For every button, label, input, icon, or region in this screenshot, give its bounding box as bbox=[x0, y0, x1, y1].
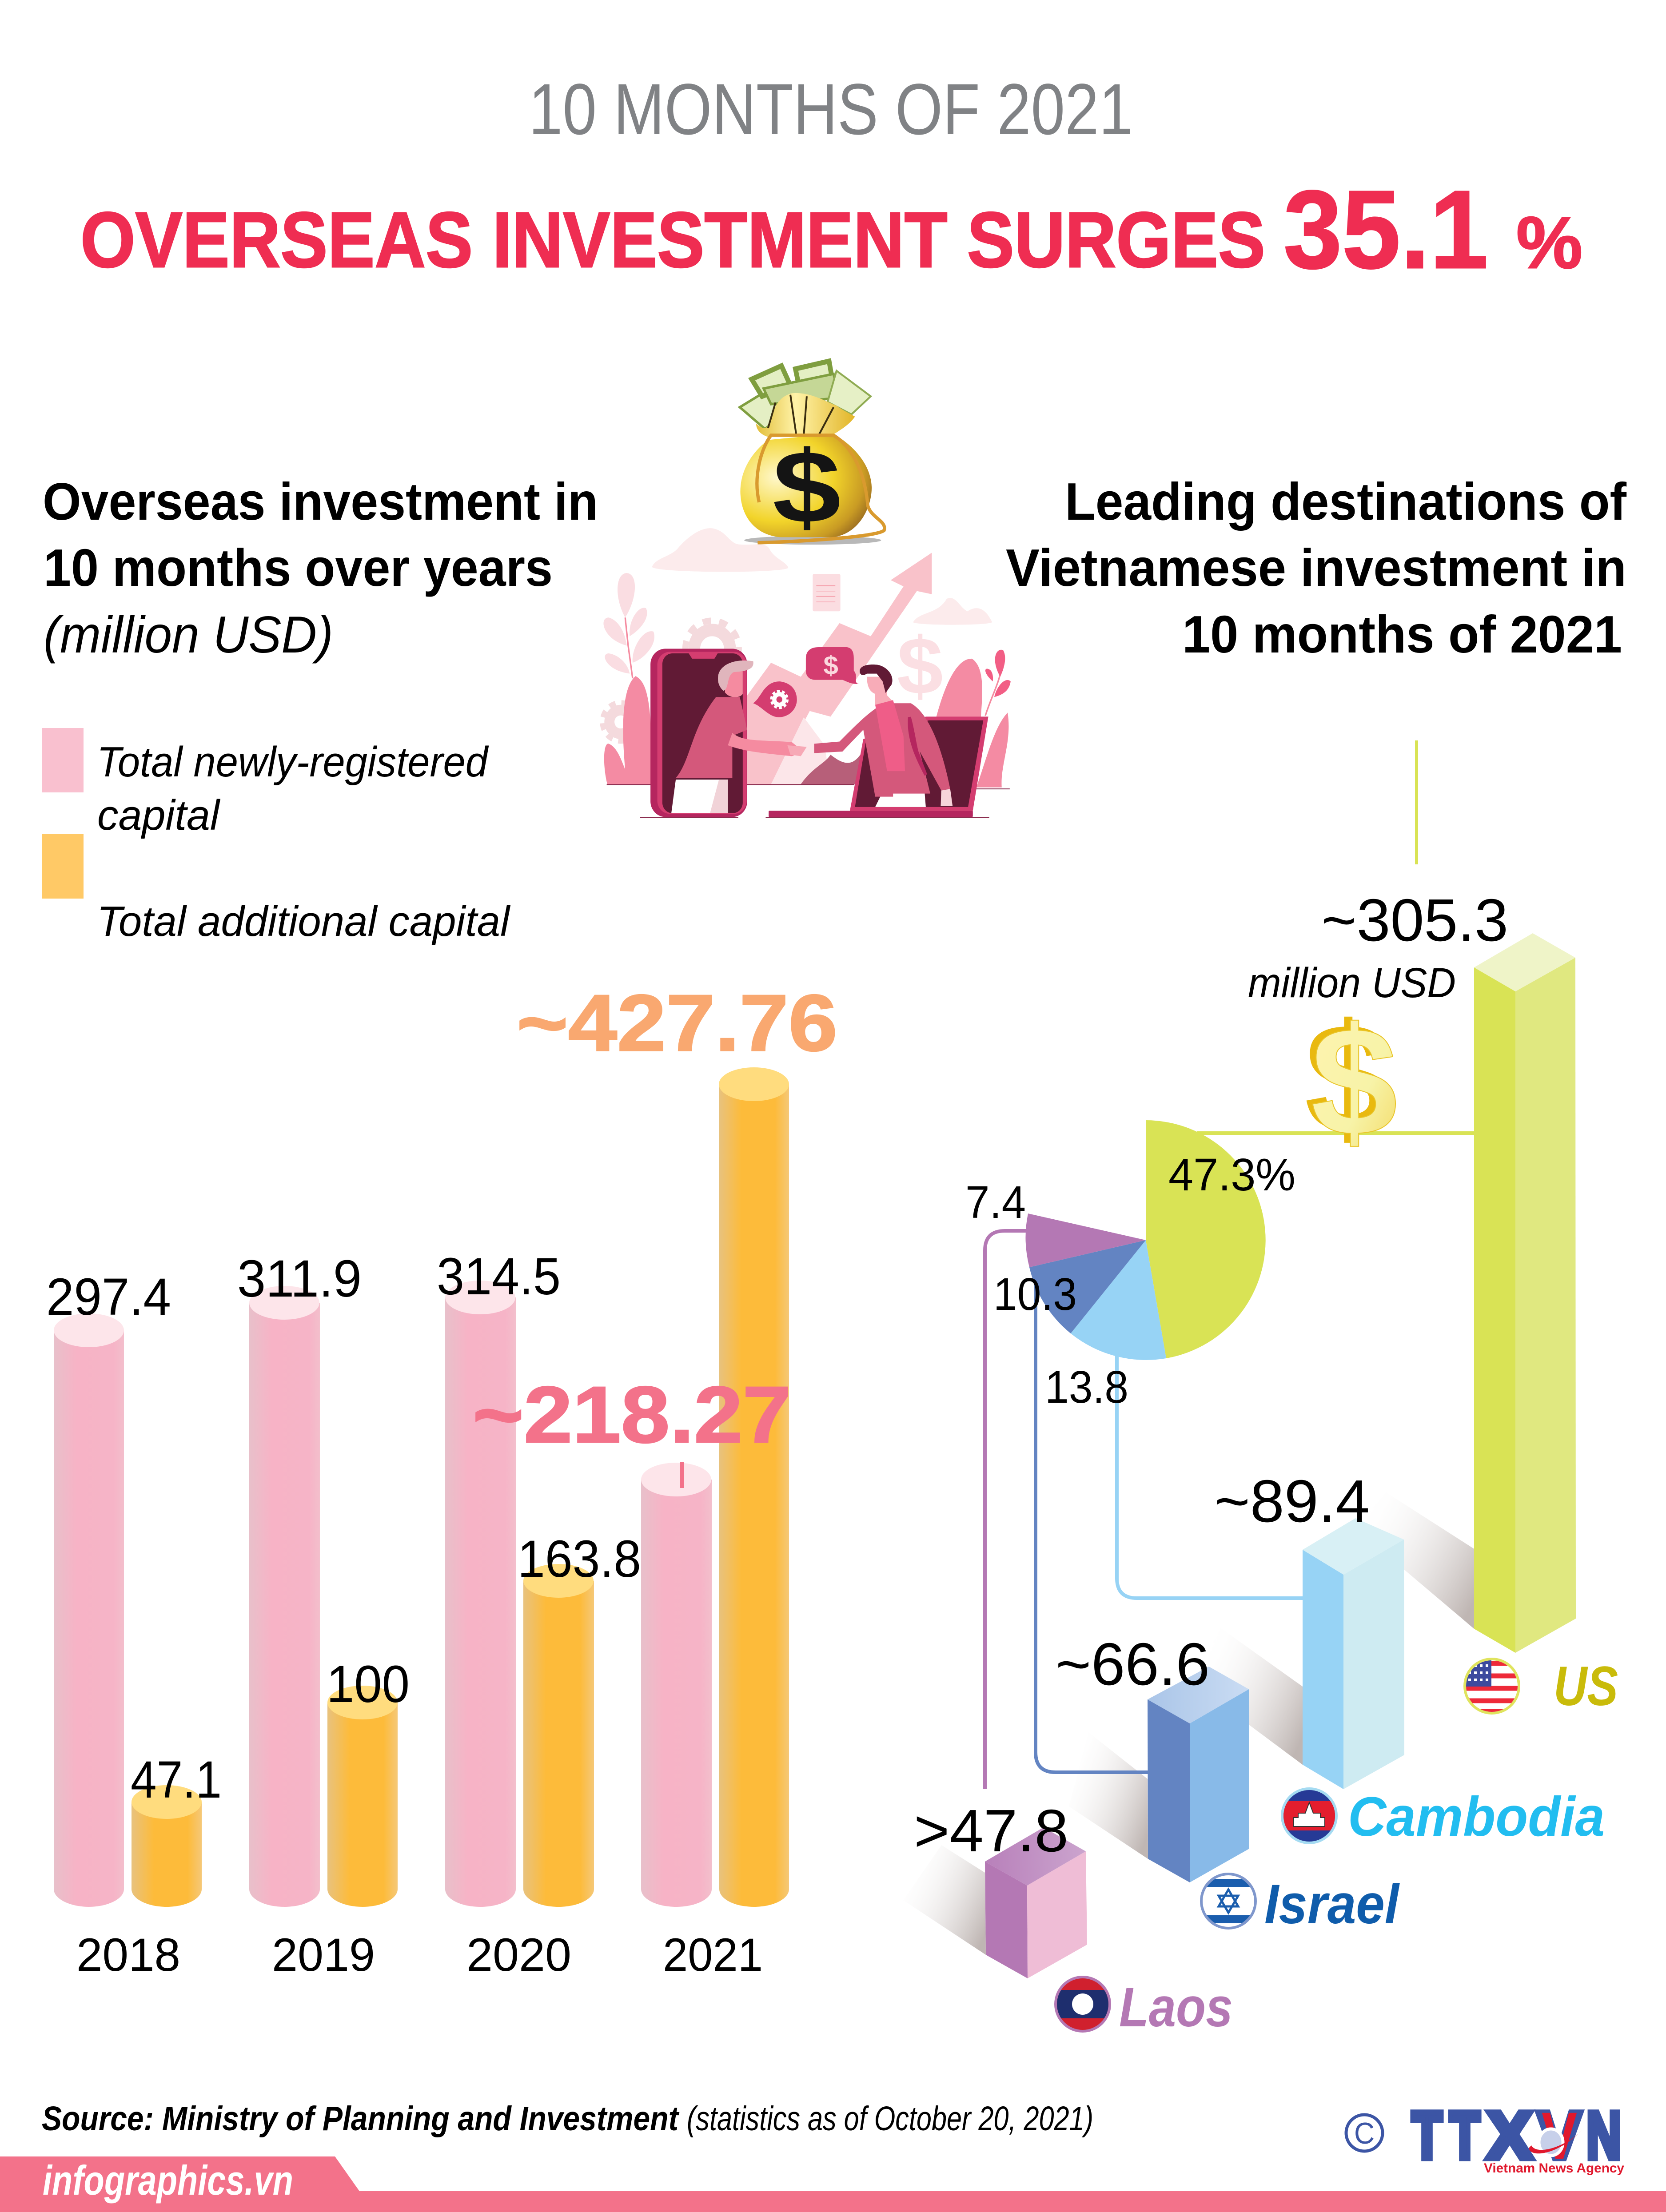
highlighted value 2021 additional: ~427.76 bbox=[517, 979, 837, 1068]
heading: overseas investment over years: (million USD) bbox=[44, 605, 333, 664]
pie chart bbox=[1026, 1120, 1266, 1360]
unit: million USD bbox=[1248, 959, 1456, 1007]
heading: leading destinations bbox=[1006, 472, 1626, 664]
ground lines bbox=[607, 784, 1010, 818]
cloud bbox=[652, 528, 788, 572]
heading: leading destinations: Leading destinations of bbox=[1065, 472, 1626, 531]
country: Cambodia: Cambodia bbox=[1348, 1786, 1605, 1848]
legend bbox=[42, 728, 511, 945]
logo: TTXVN: X bbox=[1487, 2098, 1532, 2172]
icon: money bag bbox=[740, 361, 885, 545]
heading: overseas investment over years: Overseas investment in bbox=[43, 472, 598, 531]
title: OVERSEAS INVESTMENT SURGES bbox=[80, 196, 1265, 284]
pie labels: 13.8 bbox=[1045, 1361, 1128, 1412]
icon: gold dollar: $ bbox=[1304, 991, 1391, 1164]
bar: Laos bbox=[985, 1827, 1087, 1978]
value labels: 47.1 bbox=[131, 1751, 222, 1809]
bar: Cambodia bbox=[1303, 1518, 1404, 1789]
bars 2019 bbox=[249, 1286, 398, 1907]
value labels: 297.4 bbox=[46, 1268, 171, 1326]
logo: TTXVN: Vietnam News Agency bbox=[1484, 2161, 1624, 2176]
bar: Israel bbox=[1148, 1667, 1249, 1882]
plants left bbox=[603, 573, 654, 674]
flag: Cambodia bbox=[1281, 1787, 1338, 1844]
destinations chart bbox=[903, 740, 1618, 2038]
heading: overseas investment over years bbox=[43, 472, 598, 664]
values bbox=[914, 887, 1508, 1864]
value labels: 311.9 bbox=[237, 1249, 362, 1308]
connector lines bbox=[985, 1133, 1474, 1789]
bar shadows bbox=[903, 1492, 1474, 1955]
title bbox=[80, 167, 1582, 291]
bar chart: investment by year bbox=[46, 979, 837, 1981]
copyright mark bbox=[1346, 2115, 1383, 2151]
pie labels: 10.3 bbox=[993, 1269, 1077, 1320]
dollar bubble bbox=[806, 647, 859, 684]
value labels: 163.8 bbox=[518, 1530, 641, 1588]
bars 2018 bbox=[54, 1313, 202, 1907]
title: % bbox=[1516, 202, 1582, 283]
illustration: business handshake: $ bbox=[823, 651, 838, 680]
bar: US bbox=[1474, 933, 1576, 1653]
source bbox=[42, 2100, 1093, 2138]
heading: leading destinations: 10 months of 2021 bbox=[1182, 605, 1622, 664]
flag: Israel bbox=[1200, 1872, 1257, 1930]
country: Laos: Laos bbox=[1119, 1977, 1233, 2038]
logo: TTXVN: V bbox=[1538, 2098, 1581, 2172]
logo: TTXVN: V bbox=[1542, 2098, 1577, 2173]
title: 35.1 bbox=[1283, 167, 1488, 291]
legend swatch: newly-registered capital bbox=[42, 728, 84, 792]
pie labels: 47.3% bbox=[1168, 1149, 1295, 1200]
icon: gold dollar: $ bbox=[1311, 995, 1398, 1168]
legend text: Total additional capital bbox=[97, 898, 511, 945]
gears bbox=[602, 621, 739, 741]
year labels: 2020 bbox=[466, 1929, 571, 1981]
logo: TTXVN: T bbox=[1412, 2098, 1442, 2172]
value labels: 314.5 bbox=[437, 1247, 561, 1306]
illustration: business handshake bbox=[602, 528, 1011, 818]
faded dollar: $ bbox=[897, 621, 943, 711]
woman in phone bbox=[671, 780, 728, 813]
legend text: Total newly-registered bbox=[97, 738, 489, 786]
legend text: capital bbox=[97, 792, 221, 839]
phone bbox=[650, 648, 747, 817]
source: (statistics as of October 20, 2021) bbox=[687, 2100, 1093, 2138]
logo: TTXVN: T bbox=[1450, 2098, 1480, 2172]
logo: TTXVN bbox=[1412, 2098, 1624, 2176]
vertical connector bbox=[1415, 740, 1418, 864]
heading: leading destinations: Vietnamese investment in bbox=[1006, 538, 1626, 597]
man at laptop bbox=[875, 770, 926, 807]
highlighted value 2021 new: ~218.27 bbox=[473, 1370, 791, 1460]
flag: US bbox=[1463, 1658, 1522, 1715]
year labels: 2021 bbox=[663, 1929, 763, 1981]
subtitle: 10 MONTHS OF 2021 bbox=[529, 68, 1133, 150]
values: >47.8 bbox=[914, 1797, 1068, 1864]
footer site name: infographics.vn bbox=[43, 2157, 293, 2204]
copyright mark: C bbox=[1354, 2117, 1375, 2150]
cloud bbox=[913, 598, 992, 625]
growth arrow bbox=[747, 553, 932, 784]
year labels bbox=[76, 1929, 763, 1981]
bars 2021 bbox=[641, 1067, 789, 1907]
pie labels bbox=[965, 1149, 1295, 1412]
document bbox=[813, 574, 841, 611]
country: US: US bbox=[1554, 1655, 1618, 1717]
gear bubble bbox=[753, 681, 797, 717]
values: ~305.3 bbox=[1321, 887, 1508, 954]
values: ~66.6 bbox=[1056, 1631, 1210, 1698]
legend text bbox=[97, 738, 511, 945]
heading: overseas investment over years: 10 months over years bbox=[44, 538, 553, 597]
legend swatch: additional capital bbox=[42, 834, 84, 899]
source: Source: Ministry of Planning and Investment bbox=[42, 2100, 680, 2138]
bars 2020 bbox=[445, 1281, 594, 1907]
year labels: 2019 bbox=[272, 1929, 375, 1981]
icon: money bag: $ bbox=[773, 430, 841, 544]
laptop bbox=[850, 716, 988, 811]
flag: Laos bbox=[1054, 1976, 1111, 2033]
values: ~89.4 bbox=[1214, 1468, 1370, 1535]
value labels: 100 bbox=[327, 1655, 410, 1714]
footer bar bbox=[0, 2156, 1666, 2212]
value labels bbox=[46, 1247, 641, 1809]
logo: TTXVN: N bbox=[1586, 2098, 1621, 2172]
plants right bbox=[936, 659, 1008, 788]
country: Israel: Israel bbox=[1264, 1874, 1400, 1935]
pie labels: 7.4 bbox=[965, 1177, 1026, 1228]
year labels: 2018 bbox=[76, 1929, 180, 1981]
